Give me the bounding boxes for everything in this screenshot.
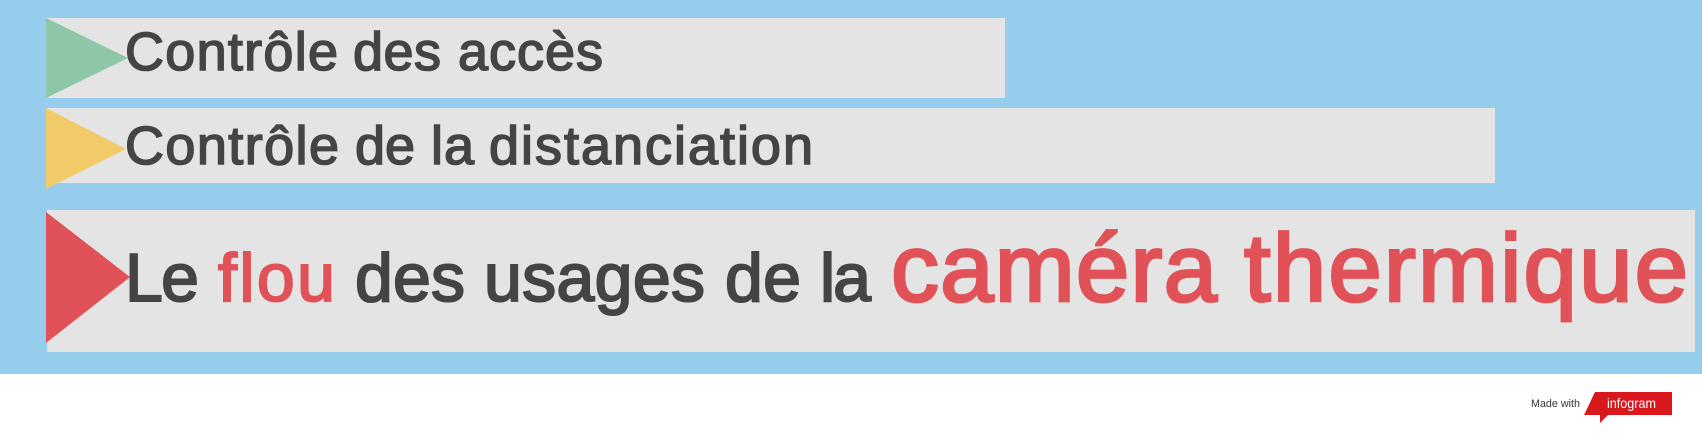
text: des usages de la: de	[725, 240, 801, 316]
text: caméra thermique: thermique	[1244, 215, 1688, 322]
text: des usages de la: la	[820, 240, 871, 316]
row: le flou des usages	[46, 210, 1695, 352]
text: le: Le	[125, 240, 199, 316]
bar: contrôle de la distanciation	[47, 108, 1495, 183]
text: made with: Made with	[1531, 398, 1580, 410]
text: contrôle de la distanciation: Contrôle	[125, 116, 339, 176]
text: contrôle des accès: accès	[458, 22, 603, 82]
row: contrôle des accès	[46, 18, 1005, 98]
text: contrôle des accès: des	[353, 22, 441, 82]
text: caméra thermique: caméra	[891, 215, 1218, 322]
made with infogram badge	[1531, 392, 1672, 423]
icon: red triangle	[46, 212, 130, 343]
bar: contrôle des accès	[47, 18, 1005, 98]
text: contrôle de la distanciation: distanciation	[489, 116, 813, 176]
text: contrôle des accès: Contrôle	[125, 22, 338, 82]
text: des usages de la: des	[355, 240, 465, 316]
text: des usages de la: usages	[484, 240, 705, 316]
bar: le flou des usages	[47, 210, 1695, 352]
icon: red flag	[1584, 392, 1672, 423]
text: flou: flou	[218, 240, 335, 316]
text: contrôle de la distanciation: de	[355, 116, 415, 176]
text: infogram: infogram	[1607, 395, 1656, 411]
row: contrôle de la distanciation	[46, 108, 1495, 189]
text: contrôle de la distanciation: la	[431, 116, 475, 176]
icon: green triangle	[46, 18, 128, 98]
icon: yellow triangle	[46, 108, 126, 189]
